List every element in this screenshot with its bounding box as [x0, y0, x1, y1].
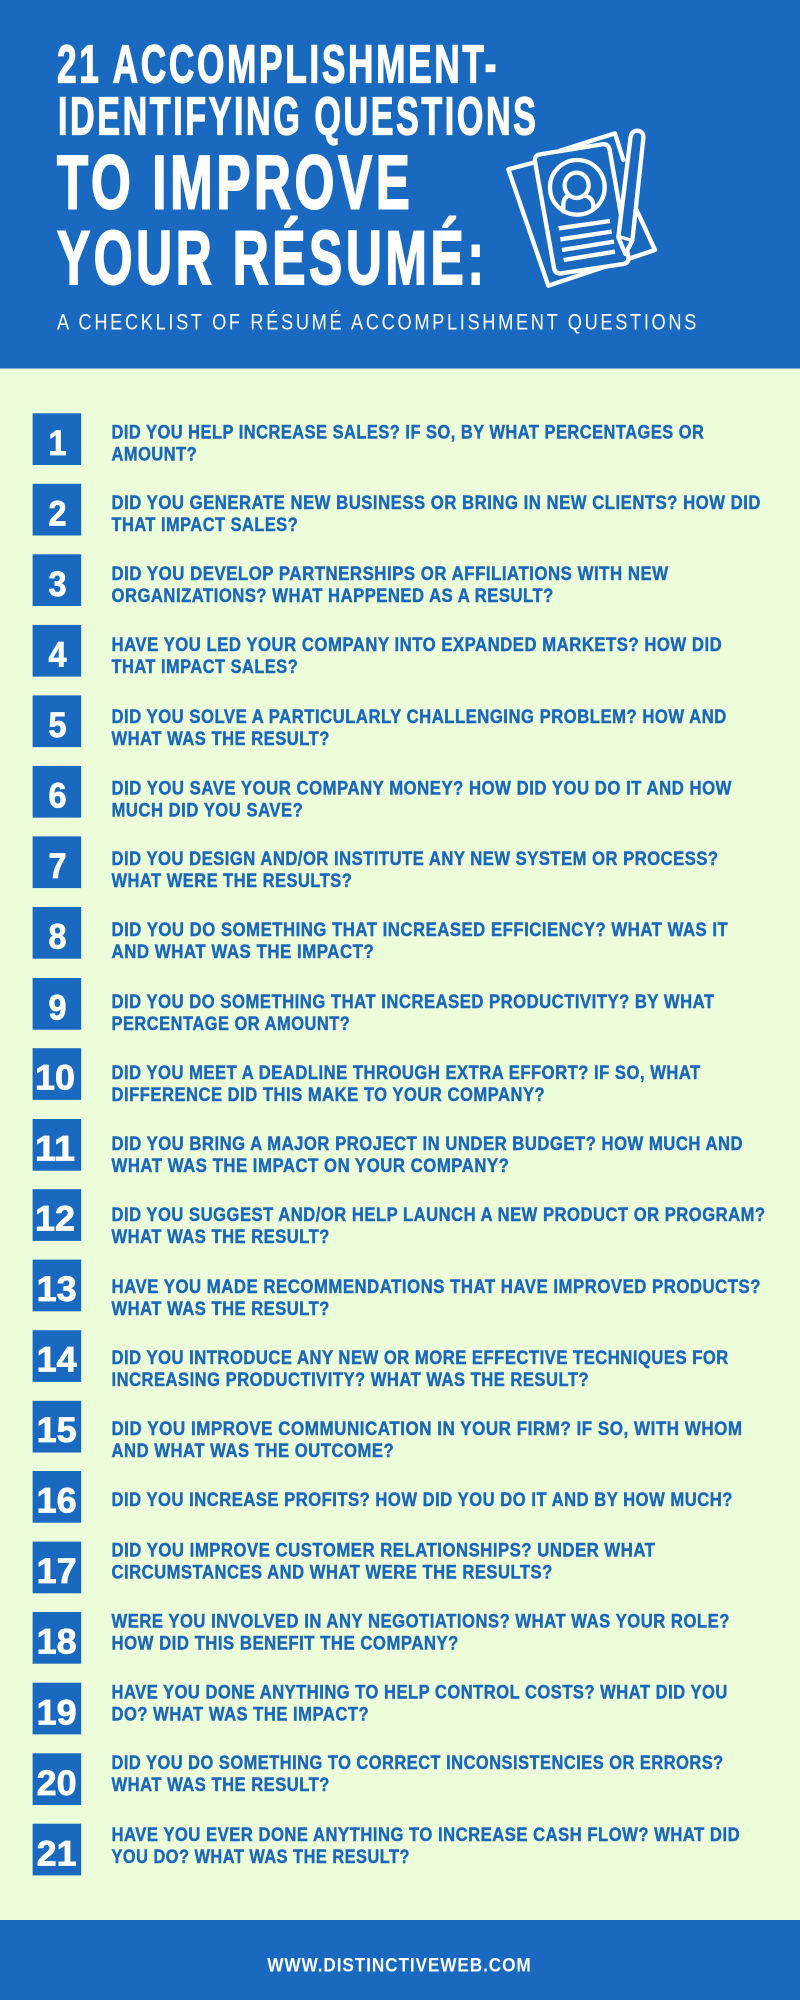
question 6: [112, 778, 732, 821]
number badge 16: 16: [37, 1481, 77, 1521]
question 17: [112, 1540, 655, 1583]
question 15: AND WHAT WAS THE OUTCOME?: [112, 1441, 394, 1462]
item 3: [33, 554, 669, 607]
question 20: WHAT WAS THE RESULT?: [112, 1775, 330, 1796]
item 10: [33, 1048, 701, 1106]
question 13: WHAT WAS THE RESULT?: [112, 1299, 330, 1320]
question 2: THAT IMPACT SALES?: [112, 515, 298, 536]
question 14: [112, 1348, 729, 1391]
title line: 21 accomplishment-identifying questions: 21 ACCOMPLISHMENT-: [57, 34, 499, 94]
question 4: THAT IMPACT SALES?: [112, 657, 298, 678]
question 3: DID YOU DEVELOP PARTNERSHIPS OR AFFILIATIONS WITH NEW: [112, 564, 669, 585]
question 2: [112, 493, 761, 536]
question 10: DID YOU MEET A DEADLINE THROUGH EXTRA EFFORT? IF SO, WHAT: [112, 1063, 701, 1084]
item 4: [33, 625, 722, 678]
number badge 13: 13: [37, 1269, 77, 1309]
question 19: [112, 1682, 728, 1725]
number badge 7: 7: [48, 846, 66, 886]
item 15: [33, 1401, 743, 1462]
item 9: [33, 978, 715, 1035]
title line: 21 accomplishment-identifying questions: IDENTIFYING QUESTIONS: [58, 86, 538, 146]
number badge 20: [33, 1753, 81, 1805]
question 12: WHAT WAS THE RESULT?: [112, 1227, 330, 1248]
number badge 10: [33, 1048, 81, 1100]
number badge 16: [33, 1471, 81, 1523]
item 19: [33, 1682, 728, 1734]
question 9: [112, 992, 715, 1035]
question 17: CIRCUMSTANCES AND WHAT WERE THE RESULTS?: [112, 1562, 553, 1583]
number badge 15: 15: [37, 1410, 77, 1450]
item 8: [33, 907, 728, 963]
number badge 4: 4: [48, 634, 67, 674]
item 13: [33, 1260, 761, 1320]
question 15: [112, 1419, 743, 1462]
question 7: DID YOU DESIGN AND/OR INSTITUTE ANY NEW SYSTEM OR PROCESS?: [112, 849, 719, 870]
question 9: DID YOU DO SOMETHING THAT INCREASED PRODUCTIVITY? BY WHAT: [112, 992, 715, 1013]
question 7: [112, 849, 719, 892]
number badge 10: 10: [35, 1058, 75, 1098]
item 12: [33, 1189, 766, 1248]
question 5: WHAT WAS THE RESULT?: [112, 729, 330, 750]
item 18: [33, 1611, 730, 1664]
number badge 6: [33, 766, 81, 818]
item 14: [33, 1330, 729, 1391]
number badge 9: 9: [48, 988, 66, 1028]
question 4: [112, 635, 722, 678]
number badge 17: [33, 1542, 81, 1593]
question 18: HOW DID THIS BENEFIT THE COMPANY?: [112, 1633, 459, 1654]
question 13: [112, 1277, 761, 1320]
item 17: [33, 1540, 655, 1593]
title line: 21 accomplishment-identifying questions: [57, 34, 538, 146]
number badge 11: [33, 1119, 81, 1171]
number badge 8: 8: [48, 917, 66, 957]
number badge 18: 18: [37, 1622, 77, 1662]
question 8: AND WHAT WAS THE IMPACT?: [112, 942, 374, 963]
panel: header: [0, 0, 800, 368]
item 1: [33, 413, 704, 465]
question 10: DIFFERENCE DID THIS MAKE TO YOUR COMPANY?: [112, 1085, 545, 1106]
title line: to improve your résumé: YOUR RÉSUMÉ:: [57, 216, 488, 301]
number badge 6: 6: [48, 776, 66, 816]
item 5: [33, 695, 727, 750]
item 6: [33, 766, 732, 821]
question 9: PERCENTAGE OR AMOUNT?: [112, 1014, 350, 1035]
item 11: [33, 1119, 743, 1177]
item 16: [33, 1471, 733, 1523]
number badge 14: [33, 1330, 81, 1382]
number badge 12: 12: [35, 1199, 75, 1239]
icon: résumé papers and pencil: [508, 131, 655, 286]
number badge 5: 5: [48, 705, 66, 745]
question list: [33, 413, 766, 1875]
title line: to improve your résumé: [57, 140, 488, 301]
number badge 2: 2: [48, 493, 66, 533]
question 21: YOU DO? WHAT WAS THE RESULT?: [112, 1847, 410, 1868]
panel: footer: [0, 1920, 800, 2000]
number badge 7: [33, 836, 81, 888]
question 11: [112, 1134, 743, 1177]
number badge 1: [33, 413, 81, 465]
question 6: MUCH DID YOU SAVE?: [112, 800, 303, 821]
number badge 3: 3: [48, 564, 66, 604]
number badge 20: 20: [37, 1763, 77, 1803]
question 1: AMOUNT?: [112, 444, 197, 465]
question 14: INCREASING PRODUCTIVITY? WHAT WAS THE RESULT?: [112, 1370, 589, 1391]
question 21: [112, 1825, 740, 1868]
number badge 18: [33, 1612, 81, 1664]
number badge 21: [33, 1824, 81, 1875]
number badge 17: 17: [37, 1551, 77, 1591]
number badge 2: [33, 484, 81, 536]
number badge 19: [33, 1683, 81, 1734]
item 21: [33, 1824, 740, 1875]
question 10: [112, 1063, 701, 1106]
number badge 15: [33, 1401, 81, 1452]
question 11: WHAT WAS THE IMPACT ON YOUR COMPANY?: [112, 1156, 509, 1177]
number badge 9: [33, 978, 81, 1030]
item 20: [33, 1753, 724, 1805]
question 20: [112, 1753, 724, 1796]
number badge 19: 19: [37, 1692, 77, 1732]
number badge 3: [33, 554, 81, 606]
footer website address: WWW.DISTINCTIVEWEB.COM: [267, 1956, 532, 1977]
number badge 12: [33, 1189, 81, 1241]
number badge 11: 11: [35, 1129, 75, 1169]
question 5: [112, 707, 727, 750]
number badge 8: [33, 907, 81, 959]
question 4: HAVE YOU LED YOUR COMPANY INTO EXPANDED MARKETS? HOW DID: [112, 635, 722, 656]
question 3: [112, 564, 669, 607]
number badge 14: 14: [37, 1340, 77, 1380]
number badge 1: 1: [48, 423, 66, 463]
question 1: [112, 422, 704, 465]
number badge 21: 21: [37, 1833, 77, 1873]
number badge 13: [33, 1260, 81, 1311]
question 1: DID YOU HELP INCREASE SALES? IF SO, BY WHAT PERCENTAGES OR: [112, 422, 704, 443]
question 3: ORGANIZATIONS? WHAT HAPPENED AS A RESULT?: [112, 586, 554, 607]
item 2: [33, 484, 761, 536]
item 7: [33, 836, 719, 892]
number badge 5: [33, 695, 81, 747]
question 8: [112, 920, 728, 963]
question 19: DO? WHAT WAS THE IMPACT?: [112, 1704, 369, 1725]
question 17: DID YOU IMPROVE CUSTOMER RELATIONSHIPS? UNDER WHAT: [112, 1540, 655, 1561]
number badge 4: [33, 625, 81, 677]
title line: to improve your résumé: TO IMPROVE: [57, 140, 414, 225]
question 7: WHAT WERE THE RESULTS?: [112, 871, 352, 892]
question 18: [112, 1611, 730, 1654]
question 12: [112, 1205, 766, 1248]
